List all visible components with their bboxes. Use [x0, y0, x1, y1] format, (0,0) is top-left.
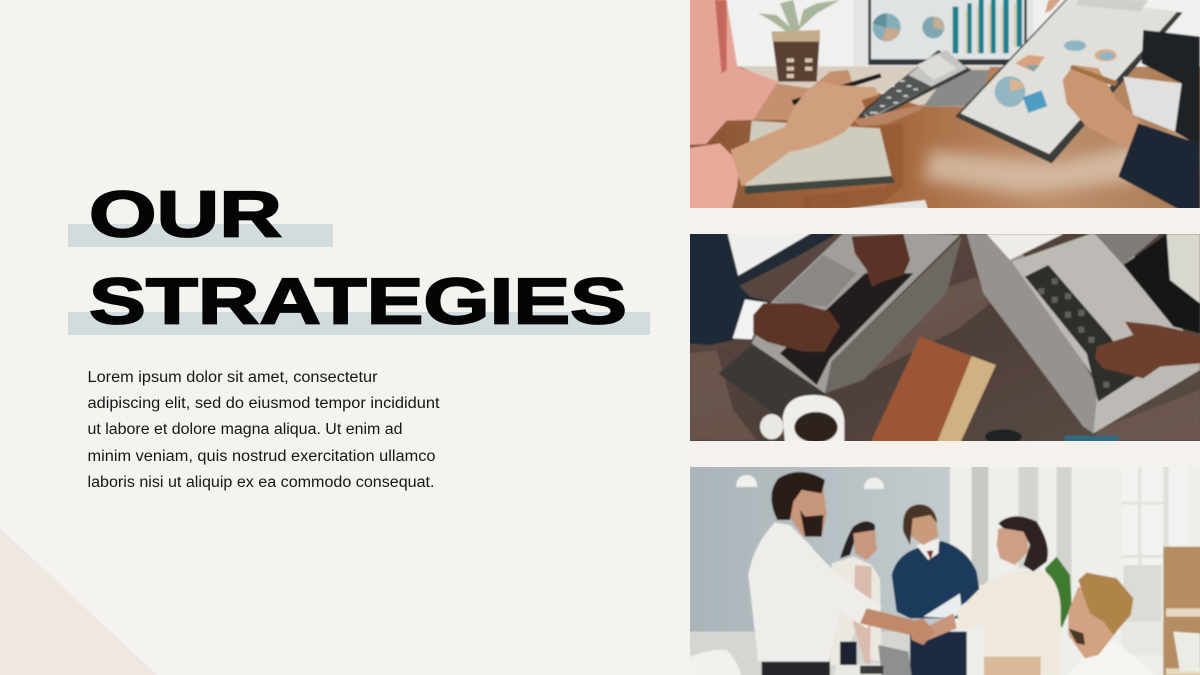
notebook edge	[745, 176, 895, 194]
left suit	[687, 230, 770, 345]
pen right	[1070, 65, 1118, 87]
wood grain	[690, 277, 1200, 440]
beard	[1068, 628, 1085, 645]
hair	[1078, 573, 1133, 635]
right column background	[690, 0, 1200, 675]
coffee	[794, 412, 838, 443]
window	[1122, 465, 1188, 632]
sweater	[892, 541, 980, 618]
beard	[800, 510, 823, 537]
coffee cup	[783, 395, 844, 443]
trousers	[762, 662, 830, 675]
woman in white blazer	[830, 521, 882, 665]
body text	[88, 369, 440, 491]
notebook	[745, 121, 892, 186]
coffee cup handle	[760, 414, 783, 439]
document	[923, 593, 962, 618]
right laptop keyboard	[1025, 265, 1137, 402]
laptop screen frame	[853, 0, 1033, 67]
ceiling lamps	[736, 475, 757, 487]
laptop screen	[868, 0, 1027, 65]
title: OUR	[89, 178, 282, 250]
handshake hands	[908, 618, 935, 645]
corner triangle decoration	[0, 528, 157, 675]
blue object	[1065, 436, 1118, 442]
collar	[916, 539, 939, 560]
pink cuff	[687, 143, 740, 210]
floor	[687, 632, 953, 675]
title	[89, 178, 627, 338]
right laptop base	[1012, 234, 1200, 433]
table far edge	[740, 67, 990, 107]
white shirt	[1065, 640, 1157, 675]
blouse	[853, 565, 872, 665]
face	[908, 513, 938, 545]
dark hair	[840, 521, 875, 558]
clipboard charts	[995, 76, 1025, 107]
wooden shelf	[1163, 547, 1200, 675]
photo: calculator and charts on a desk	[690, 0, 1200, 208]
screen bar chart	[953, 0, 1022, 53]
title highlight bars	[68, 224, 650, 335]
forearm	[923, 613, 957, 640]
pink shirt	[687, 0, 778, 145]
patterned fabric	[1095, 234, 1160, 265]
seated man	[1065, 573, 1157, 675]
left lower hand	[753, 303, 840, 352]
bearded man	[748, 472, 913, 675]
left top hand	[852, 234, 910, 287]
calculator face	[863, 50, 967, 119]
plant	[1045, 557, 1072, 628]
body text: laboris nisi ut aliquip ex ea commodo consequat.	[88, 474, 434, 491]
plant pot rim	[772, 30, 820, 42]
body text: adipiscing elit, sed do eiusmod tempor incididunt	[88, 395, 440, 412]
right laptop lid	[967, 234, 1098, 433]
table	[833, 662, 950, 675]
laptop on table	[878, 645, 912, 675]
right hand	[1095, 322, 1200, 378]
photo: two people on laptops from above	[690, 234, 1200, 441]
left laptop base	[752, 230, 960, 393]
body text: Lorem ipsum dolor sit amet, consectetur	[88, 369, 378, 386]
plant pot pattern	[787, 58, 812, 78]
wooden table	[687, 230, 1200, 447]
bright window background	[687, 0, 1200, 73]
table dark grain	[803, 123, 903, 208]
book cover	[870, 337, 972, 443]
white paper at table edge	[850, 200, 928, 210]
dark hair	[998, 516, 1048, 572]
face	[997, 528, 1028, 565]
screen pie charts	[873, 13, 901, 41]
hair	[771, 472, 825, 520]
title: STRATEGIES	[89, 264, 627, 338]
calculator display	[917, 55, 957, 80]
left shirt	[727, 230, 822, 276]
plant leaves	[758, 0, 840, 32]
body text: ut labore et dolore magna aliqua. Ut enim ad	[88, 421, 402, 438]
fingers top	[1045, 0, 1062, 13]
right white sleeve	[1167, 234, 1200, 303]
right suit dark area	[1123, 234, 1200, 333]
wooden table	[687, 67, 1200, 213]
book spine	[937, 356, 996, 443]
paper on table	[987, 234, 1063, 260]
left hand on calculator	[731, 82, 878, 187]
right laptop keys	[1038, 278, 1109, 388]
clipboard paper	[961, 0, 1177, 154]
dark jacket top right	[1142, 30, 1200, 147]
blazer	[830, 557, 882, 665]
navy sleeve	[1118, 123, 1200, 210]
left laptop lid	[825, 237, 962, 393]
face	[853, 530, 877, 560]
clipboard clip	[1077, 0, 1148, 12]
face	[1068, 587, 1117, 658]
pen	[792, 73, 882, 105]
dark phone	[718, 345, 827, 417]
keyboard blur behind	[1123, 77, 1182, 132]
white columns	[950, 465, 1200, 675]
trackpad	[773, 255, 857, 307]
laptop base	[923, 70, 990, 107]
left laptop keyboard	[780, 273, 913, 385]
clipboard shadow edge	[955, 0, 1183, 163]
calculator keys	[870, 80, 918, 114]
trousers	[984, 657, 1041, 675]
calculator back	[857, 50, 972, 124]
wall	[687, 465, 953, 635]
woman in cream blouse	[923, 516, 1061, 675]
white chair	[687, 650, 742, 675]
hair	[903, 504, 937, 545]
forearm upper	[753, 70, 853, 120]
lower palm under calculator	[853, 104, 925, 126]
phone on table	[860, 666, 883, 674]
charger cable	[985, 429, 1022, 444]
body text: minim veniam, quis nostrud exercitation ullamco	[88, 448, 436, 465]
man in navy sweater	[892, 504, 980, 675]
neck and face	[788, 488, 827, 537]
trousers	[910, 632, 967, 675]
calculator keypad	[863, 75, 932, 117]
table glare	[923, 133, 1200, 193]
blouse	[957, 570, 1061, 675]
right hand	[1063, 65, 1145, 148]
white shirt	[748, 522, 882, 662]
plant pot	[772, 32, 820, 82]
arm	[860, 608, 913, 635]
photo: team handshake in office	[690, 467, 1200, 675]
left shirt cuff	[733, 299, 767, 339]
